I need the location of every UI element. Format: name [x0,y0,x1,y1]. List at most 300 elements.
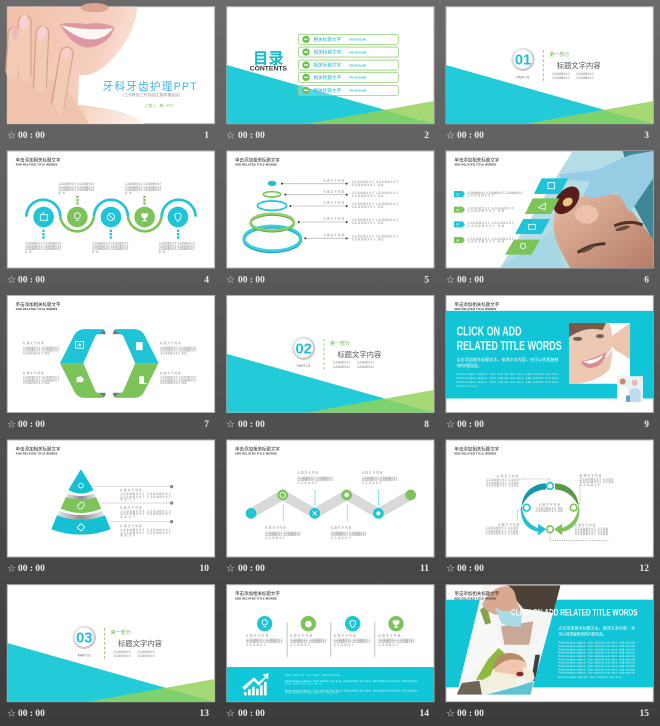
heading [250,50,288,73]
numbered tags and text: 点击添加相关文字 点击添加相关文字 点击添加相关文字 [467,190,524,194]
footer 12: ☆ [446,564,455,574]
footer 3: 00 : 00 [457,131,484,141]
footer 5 [226,275,429,286]
header: 单击添加相关标题文字 [454,301,500,308]
column text: 标题文字内容 [290,633,312,637]
cycle text: 点击添加相关文字 点击添加 [575,532,609,536]
section text: 点击添加相关文字 [333,360,351,364]
footer 2: 00 : 00 [238,131,265,141]
number badge [511,48,535,79]
zigzag text: 标题文字内容 [331,525,352,529]
body text: Pellentesque sapien. Your subtitle text here, Add subtitle [558,642,636,645]
footer 6: ☆ [446,275,455,286]
pyramid icons [77,483,85,531]
number badge: 02 [296,341,312,357]
left text: 点击添加相关文字 添加 [23,351,50,355]
cycle text: 点击添加相关文字 点击添加 [575,526,609,530]
numbered tags and text: 点击添加相关文字 点击添加相关文字 [467,221,515,225]
pyramid text: 点击添加相关文字 点击添加相关文字 [120,530,172,534]
zigzag text: 点击添加相关文字 点击添加相关文字 [265,533,302,537]
photo: dentist and child [456,585,563,695]
numbered tags and text: 点击添加相关文字 添加 [467,209,505,213]
numbered tags and text: 点击添加相关文字 [467,193,495,197]
zigzag nodes [246,490,416,519]
body text: Pellentesque sapien. Your subtitle text here, Add subtitle [558,665,636,668]
ring labels: 点击添加相关文字 添加 [352,193,384,197]
column text: 点击添加文字 [334,642,354,646]
ring labels: 标题文字内容 [323,201,344,205]
column text: 点击添加文字 [378,642,399,646]
column icons [257,616,404,631]
footer 1 [7,130,209,142]
presenter: 汇报人：第一PPT [145,103,175,108]
big title: CLICK ON ADD [457,323,522,338]
left text: 点击添加相关文字 点击添加相关文字 [23,348,60,352]
left text: 标题文字内容 [23,341,44,345]
zigzag text: 点击添加相关文字 点击添加相关文字 [331,533,367,537]
numbered tags and text: 01 [456,192,460,196]
zigzag text: 点击添加文字 [331,535,351,539]
footer 4: 00 : 00 [18,276,45,286]
cycle text: 点击添加相关文字 点击添加 [486,483,519,487]
body text: Pellentesque sapien. Your subtitle text here, Add subtitle text here [457,377,559,380]
header: ADD RELATED TITLE WORDS [16,163,58,167]
step text: 点击添加相关文字 点击添加相关文字 [92,244,129,248]
numbered tags and text: 03 [456,223,460,227]
leader lines [92,485,173,523]
step text: 点击添加相关文字 点击添加相关文字 [125,185,162,189]
footer 7: 00 : 00 [18,420,45,430]
teal band [227,667,434,702]
header: ADD RELATED TITLE WORDS [235,163,277,167]
body text: Pellentesque sapien. Your subtitle text here, Add subtitle [558,658,636,661]
body text: Pellentesque sapien. Your subtitle text here, Add subtitle [558,655,636,658]
step text: 添加 [25,249,32,253]
ring labels: 标题文字内容 [323,217,344,221]
cycle arrows [521,483,579,534]
header: ADD RELATED TITLE WORDS [16,452,58,456]
section text [330,340,382,368]
step text: 点击添加相关文字 点击添加相关文字 [159,244,196,248]
body text [558,626,636,679]
column text: 点击添加文字 [290,642,311,646]
column text: 点击添加相关文字 点击添加相关文字 [290,640,327,644]
teal band [446,311,653,398]
section text: 点击添加相关文字 [137,649,156,653]
header: 单击添加相关标题文字 [16,156,61,163]
cycle text: 标题文字内容 [575,523,596,527]
left text [23,341,60,384]
body text: Pellentesque sapien. Your subtitle text here, Add subtitle text here [457,381,559,384]
body text: Pellentesque sapien. Your subtitle text here, Add subtitle [558,668,636,671]
footer 9: 9 [644,420,649,430]
footer 13 [7,708,209,720]
column text: 点击添加文字 [246,642,267,646]
ring labels: 点击添加相关文字 点击添加相关文字 [352,202,399,206]
column text: 点击添加相关文字 点击添加相关文字 [378,640,416,644]
big title [457,323,562,353]
dashed connectors [283,489,379,521]
right text: 点击添加相关文字 点击添加相关文字 [160,378,197,382]
footer 3: ☆ [446,130,455,142]
cycle text: 点击添加相关文字 点击添加 [485,528,519,532]
footer 10: 00 : 00 [18,564,45,574]
number badge: 01 [515,53,531,69]
cycle text: 点击添加相关文字 点击添加 [486,480,519,484]
ring labels: 标题文字内容 [323,189,344,193]
numbered tags and text: 点击添加相关文字 点击添加相关文字 [467,236,515,240]
right text: 标题文字内容 [160,341,181,345]
header: 单击添加相关标题文字 [16,301,61,308]
body text: Pellentesque sapien. Your subtitle text here, Add subtitle text here [457,373,559,376]
cycle text: 点击添加相关文字 添加 [535,509,563,513]
ring labels: 点击添加相关文字 点击添加相关文字 [352,218,399,222]
column text [246,633,416,646]
body text: Pellentesque sapien. Your subtitle text here [558,676,622,679]
slide 8: section 02 [227,296,434,412]
pyramid text: 点击添加相关文字 点击添加相关文字 [120,492,172,496]
footer 8: ☆ [226,420,235,430]
ring labels: 标题文字内容 [323,233,344,237]
number badge: PART 01 [297,364,310,368]
ring stack [244,181,301,252]
contents list: 相关标题文字 [313,49,342,56]
section text: 第一部分 [111,629,131,636]
section text: 点击添加相关文字 [552,71,571,75]
body text: Subtitle text. [457,385,479,388]
pyramid text: 标题文字内容 [120,505,142,509]
body text [457,357,559,388]
contents list: THE HEADLINE [349,51,367,54]
footer 6: 6 [644,276,649,286]
step text: 添加 [92,249,99,253]
step text: 添加 [58,190,66,194]
zigzag text: 点击添加相关文字 点击添加相关文字 [265,530,302,534]
wave line [26,200,196,231]
pyramid text: 点击添加相关文字 点击添加相关文字 [120,509,172,513]
pyramid text: 点击添加相关文字 点击添加相关文字 [120,528,172,532]
footer 15 [446,708,649,720]
icon panels [505,178,568,255]
footer 15: 00 : 00 [457,709,484,719]
header [454,301,500,311]
pyramid text: 点击添加相关文字 点击添加相关文字 [120,512,172,516]
step circles and icons [33,207,188,227]
header: 单击添加相关标题文字 [235,156,280,163]
zigzag text: 点击添加文字 [362,480,382,484]
small photo: dentists [617,376,643,402]
section text: 标题文字内容 [557,61,601,70]
pyramid [51,470,111,535]
cycle text: 点击添加相关文字 点击添加 [486,478,519,482]
header: ADD RELATED TITLE WORDS [235,596,277,600]
ring labels: 点击添加相关文字 添加 [352,182,384,186]
header [454,590,500,600]
step text: 点击添加相关文字 点击添加相关文字 [92,241,129,245]
number badge: 03 [76,631,92,647]
section text: 点击添加相关文字 [552,76,571,80]
slide 7: hexagon arrows [7,296,215,412]
numbered tags and text: 点击添加相关文字 点击添加相关文字 [467,206,515,210]
cycle text: 点击添加相关文字 点击添加 [580,480,614,484]
footer 7: 7 [204,420,209,430]
footer 8: 8 [424,420,429,430]
section text: 标题文字内容 [118,639,163,648]
footer 5: 00 : 00 [238,276,265,286]
step text: 点击添加相关文字 点击添加相关文字 [58,188,96,192]
footer 1: 1 [204,131,209,141]
step text: 添加 [159,249,166,253]
footer 11 [226,564,429,574]
number badge: PART 01 [516,75,530,79]
title: 牙科牙齿护理PPT [103,80,197,93]
contents list: THE HEADLINE [349,77,367,80]
step text: 点击添加相关文字 点击添加相关文字 [125,188,162,192]
numbered tags and text [454,190,524,243]
zigzag text: 点击添加相关文字 点击添加相关文字 [331,530,367,534]
slide 14: four columns and chart band [227,585,434,702]
heading: CONTENTS [250,66,288,73]
teal and green background shapes [7,643,215,702]
zigzag text: 标题文字内容 [265,525,286,529]
header [454,156,500,167]
contents list: 相关标题文字 [313,62,342,69]
teal and green background shapes [446,65,653,124]
body text: Pellentesque sapien. Your subtitle text here, Add subtitle [558,672,636,675]
pyramid text: 添加文字 [120,497,136,501]
body text: 点击添加相关标题文本，修改文本内容，也 [558,626,635,631]
step text: 点击添加相关文字 点击添加相关文字 [25,241,62,245]
band text: Pellentesque sapien. Your subtitle text here, Add subtitle text here, Add subtitle text here, Add subtitle [285,689,418,692]
footer 9: ☆ [446,420,455,430]
slide 2: contents [227,7,434,124]
column text: 点击添加相关文字 点击添加相关文字 [290,637,327,641]
pyramid text: 添加文字 [120,514,136,518]
header: ADD RELATED TITLE WORDS [454,596,496,600]
column text: 标题文字内容 [334,633,356,637]
heading: 目录 [253,50,284,67]
step text: 点击添加相关文字 点击添加相关文字 [125,182,162,186]
cycle text: 标题文字内容 [580,473,602,477]
band text [285,674,418,695]
ring labels: 点击添加相关文字 添加 [352,221,384,225]
right text: 点击添加相关文字 点击添加相关文字 [160,348,197,352]
slide 3: section 01 [446,7,653,124]
left text: 标题文字内容 [23,371,44,375]
footer 12: 12 [640,564,649,574]
dashed connectors [517,474,609,540]
footer 4: 4 [204,276,209,286]
cycle text: 点击添加相关文字 点击添加 [580,477,614,481]
header: 单击添加相关标题文字 [235,590,280,597]
footer 8: 00 : 00 [238,420,265,430]
contents list: 相关标题文字 [313,74,342,81]
section text: 第一部分 [330,340,350,347]
column text: 点击添加相关文字 点击添加相关文字 [378,637,416,641]
section text: 点击添加相关文字 [113,654,132,658]
footer 3: 3 [644,131,649,141]
left text: 点击添加相关文字 点击添加相关文字 [23,375,60,379]
header: 单击添加相关标题文字 [235,445,280,452]
cycle nodes [523,483,577,533]
section text: 点击添加相关文字 [357,360,375,364]
column text: 标题文字内容 [378,633,401,637]
header [454,445,500,456]
band text: Add subtitle text here, subtitle [285,692,339,695]
footer 5: ☆ [226,275,235,286]
ring labels: 点击添加相关文字 点击添加相关文字 [352,234,399,238]
header: 单击添加相关标题文字 [454,590,500,597]
footer 12: 00 : 00 [457,564,484,574]
footer 3 [446,130,649,142]
header: ADD RELATED TITLE WORDS [235,452,277,456]
section text [111,629,163,658]
section text: 点击添加相关文字 [137,654,156,658]
footer 14: 14 [420,709,429,719]
slide 11: zigzag [227,440,434,557]
band text: Pellentesque sapien. Your subtitle text here, Add subtitle text here, Add subtitle text here, Add subtitle [285,680,418,683]
pyramid text: 标题文字内容 [120,524,142,528]
footer 8 [226,420,429,430]
header: 单击添加相关标题文字 [16,445,61,452]
big title: RELATED TITLE WORDS [457,338,562,353]
column dividers [287,622,375,657]
column text: 点击添加相关文字 点击添加相关文字 [246,640,283,644]
zigzag band [251,495,411,513]
body text: Pellentesque sapien. Your subtitle text here, Add subtitle [558,662,636,665]
header: ADD RELATED TITLE WORDS [454,163,496,167]
zigzag text: 点击添加文字 [297,480,318,484]
cycle text: 点击添加相关文字 点击添加 [485,526,519,530]
slide 1: cover [7,3,215,124]
header [16,301,61,311]
footer 10 [7,564,209,574]
hexagon segments [60,329,159,398]
step text: 点击添加相关文字 点击添加相关文字 [92,247,129,251]
band text: Your subtitle text here, add subtitle [285,674,341,677]
header [16,156,61,167]
zigzag text: 点击添加相关文字 点击添加相关文字 [362,475,398,479]
photo: smiling woman [7,3,145,124]
step text [25,182,196,253]
cycle text: 点击添加相关文字 点击添加 [485,531,519,535]
body text: Pellentesque sapien. Your subtitle text here, Add subtitle [558,648,636,651]
section text: 点击添加相关文字 [333,364,351,368]
slide 12: cycle diagram [446,440,653,557]
header [235,445,280,456]
footer 14: 00 : 00 [238,709,265,719]
footer 13: ☆ [7,708,16,720]
footer 11: ☆ [226,564,235,574]
footer 1: 00 : 00 [18,131,45,141]
cycle text: 点击添加文字 [580,482,601,486]
slide 10: pyramid [7,440,215,557]
ring labels: 点击添加相关文字 添加 [352,205,384,209]
header: ADD RELATED TITLE WORDS [454,452,496,456]
pyramid text: 点击添加相关文字 点击添加相关文字 [120,494,172,498]
numbered tags and text: 02 [456,208,460,212]
footer 11: 00 : 00 [238,564,265,574]
left text: 点击添加相关文字 点击添加相关文字 [23,345,60,349]
body text: Pellentesque sapien. Your subtitle text here, Add subtitle [558,645,636,648]
contents list: THE HEADLINE [349,39,367,42]
zigzag text [265,470,398,539]
section text: 第一部分 [549,51,569,58]
contents list: 相关标题文字 [313,36,342,43]
slide 5: stacked rings [227,151,434,268]
zigzag text: 点击添加相关文字 点击添加相关文字 [297,478,334,482]
slide 6: dental patient photo [446,151,653,268]
body text: Pellentesque sapien. Your subtitle text here, Add subtitle [558,652,636,655]
footer 6: 00 : 00 [457,276,484,286]
footer 15: 15 [640,709,649,719]
contents list [298,34,398,95]
cycle text: 标题文字内容 [539,503,560,507]
section text: 点击添加相关文字 [576,76,595,80]
right text [160,341,197,384]
slide 4: wave timeline [7,151,215,268]
footer 10: 10 [200,564,209,574]
header [235,590,280,600]
ring labels: 标题文字内容 [323,178,344,182]
numbered tags and text: 点击添加相关文字 添加 [467,223,505,227]
section text: 点击添加相关文字 [576,71,595,75]
step text: 点击添加相关文字 点击添加相关文字 [58,182,96,186]
section text: 点击添加相关文字 [357,364,375,368]
zigzag text: 点击添加文字 [265,535,286,539]
number badge [292,336,315,368]
footer 2: 2 [424,131,429,141]
footer 7: ☆ [7,420,16,430]
slide 15: dentist and child [446,585,653,702]
body text: 可以将您复制你的内容至此。 [558,632,607,637]
numbered tags and text: 点击添加相关文字 添加 [467,239,505,243]
cycle text: 标题文字内容 [497,474,519,478]
step text: 点击添加相关文字 点击添加相关文字 [25,247,62,251]
step text: 点击添加相关文字 点击添加相关文字 [159,247,196,251]
pyramid text [120,488,172,537]
column text: 点击添加相关文字 点击添加相关文字 [246,637,283,641]
footer 4: ☆ [7,275,16,286]
footer 14: ☆ [226,708,235,720]
step text: 点击添加相关文字 点击添加相关文字 [25,244,62,248]
slide 9: teal band with photo [446,296,653,412]
zigzag text: 标题文字内容 [362,470,383,474]
footer 10: ☆ [7,564,16,574]
footer 2 [226,130,429,142]
band text: Add subtitle text here [285,683,322,686]
footer 9 [446,420,649,430]
section text [549,51,601,80]
contents list: 相关标题文字 [313,87,342,94]
section text: 标题文字内容 [337,350,382,359]
footer 4 [7,275,209,286]
footer 15: ☆ [446,708,455,720]
pyramid text: 添加文字 [120,533,136,537]
zigzag text: 点击添加相关文字 点击添加相关文字 [297,475,334,479]
footer 13: 00 : 00 [18,709,45,719]
header [16,445,61,456]
icon: growth chart [242,673,269,695]
section text: 点击添加相关文字 [113,649,132,653]
footer 9: 00 : 00 [457,420,484,430]
cycle text: 点击添加相关文字 点击添加 [575,529,609,533]
footer 1: ☆ [7,130,16,142]
right text: 点击添加相关文字 点击添加相关文字 [160,375,197,379]
cycle text: 点击添加相关文字 添加 [535,506,563,510]
step text: 点击添加相关文字 点击添加相关文字 [58,185,96,189]
ring labels [323,178,399,241]
